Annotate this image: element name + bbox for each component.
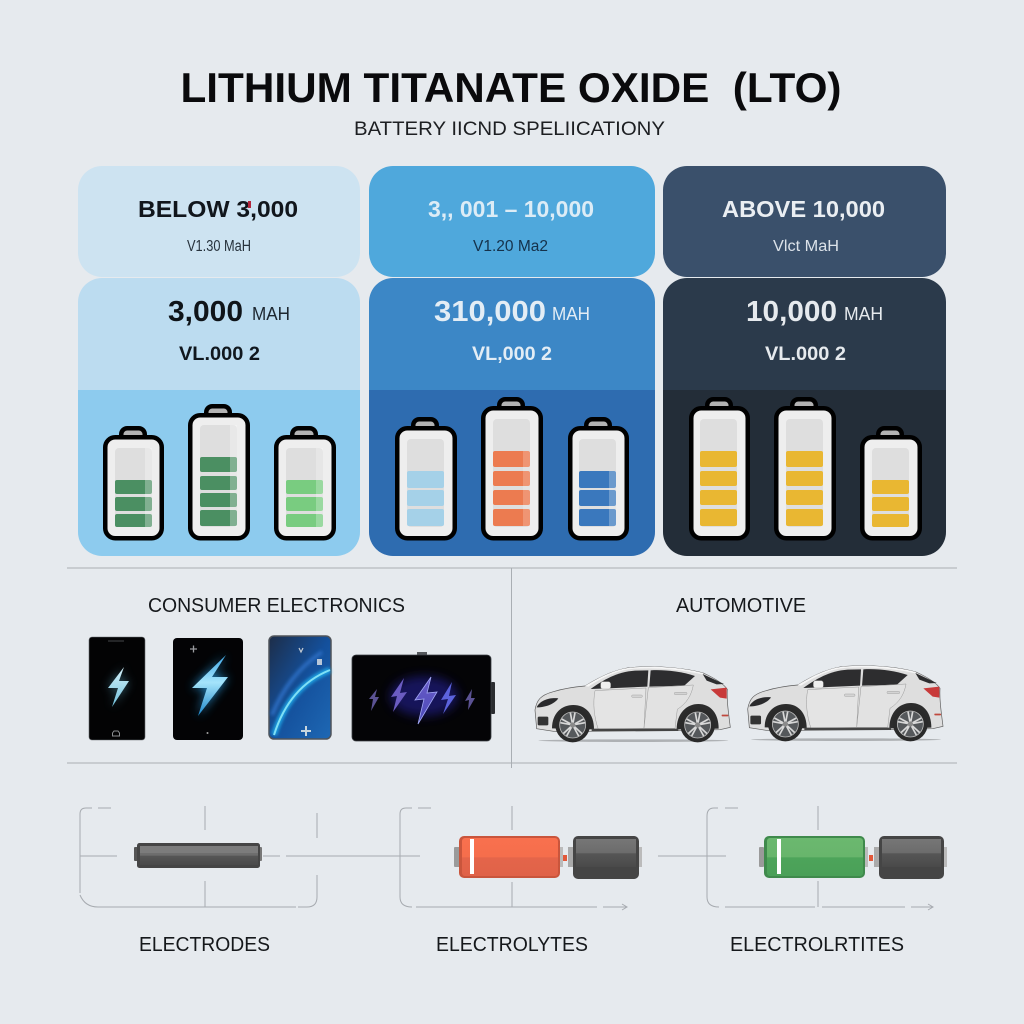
capacity block: 3,000 mAh [78, 278, 360, 390]
icon: landscape device with bolts [352, 652, 495, 741]
range card: below 3,000: BELOW 3,000 [138, 196, 298, 222]
icon: charging tablet [173, 638, 243, 740]
range card: 3,001-10,000: 3,, 001 – 10,000 [428, 196, 594, 222]
label: electrolrtites: ELECTROLRTITES [730, 934, 904, 956]
battery: 3 green cells [105, 428, 162, 538]
battery: 4 yellow cells A [691, 399, 748, 538]
icon: smartphone [89, 637, 145, 740]
capacity block: 3,000 mAh: VL.000 2 [179, 343, 260, 365]
battery zone: green batteries [78, 390, 360, 556]
range card: below 3,000 [78, 166, 360, 277]
panel: below 3,000 [78, 166, 360, 556]
capacity block: 10,000 mAh [663, 278, 946, 390]
icon: car right [748, 666, 943, 741]
capacity block: 310,000 mAh: MAH [552, 304, 590, 324]
battery: 4 yellow cells B [776, 399, 834, 538]
range card: above 10,000: Vlct MaH [773, 238, 839, 255]
label: electrodes: ELECTRODES [139, 934, 270, 956]
range card: above 10,000: ABOVE 10,000 [722, 196, 885, 222]
range card: below 3,000: V1.30 MaH [187, 238, 251, 255]
panel: above 10,000 [663, 166, 946, 556]
battery: 4 orange cells [483, 399, 541, 538]
battery: 3 blue cells [570, 419, 627, 538]
capacity block: 10,000 mAh: MAH [844, 304, 883, 324]
component: electrolyte cell pair [454, 836, 642, 879]
icon: car left [535, 667, 730, 742]
heading: consumer electronics: CONSUMER ELECTRONICS [148, 595, 405, 617]
component: green electrolyte cell pair [759, 836, 947, 879]
capacity block: 310,000 mAh [369, 278, 655, 390]
capacity block: 10,000 mAh: VL.000 2 [765, 343, 846, 365]
battery zone: yellow batteries [663, 390, 946, 556]
battery: 3 light green cells [276, 428, 334, 538]
heading: automotive: AUTOMOTIVE [676, 595, 806, 617]
battery: 3 yellow cells [862, 428, 920, 538]
capacity block: 3,000 mAh: 3,000 [168, 296, 243, 328]
range card: above 10,000 [663, 166, 946, 277]
title: LITHIUM TITANATE OXIDE (LTO) [180, 64, 842, 111]
battery: 3 pale blue cells [397, 419, 455, 538]
range card: 3,001-10,000 [369, 166, 655, 277]
capacity block: 310,000 mAh: 310,000 [434, 296, 546, 328]
icon: tablet with light streak [269, 636, 331, 739]
label: electrolytes: ELECTROLYTES [436, 934, 588, 956]
component: electrode cell [134, 843, 262, 868]
battery zone: mixed batteries [369, 390, 655, 556]
battery: 4 green cells [190, 406, 248, 538]
capacity block: 10,000 mAh: 10,000 [746, 296, 837, 328]
panel: 3,001-10,000 [369, 166, 655, 556]
capacity block: 310,000 mAh: VL,000 2 [472, 343, 552, 365]
range card: 3,001-10,000: V1.20 Ma2 [473, 238, 548, 255]
capacity block: 3,000 mAh: MAH [252, 304, 290, 324]
subtitle: BATTERY IICND SPELIICATIONY [354, 119, 665, 140]
